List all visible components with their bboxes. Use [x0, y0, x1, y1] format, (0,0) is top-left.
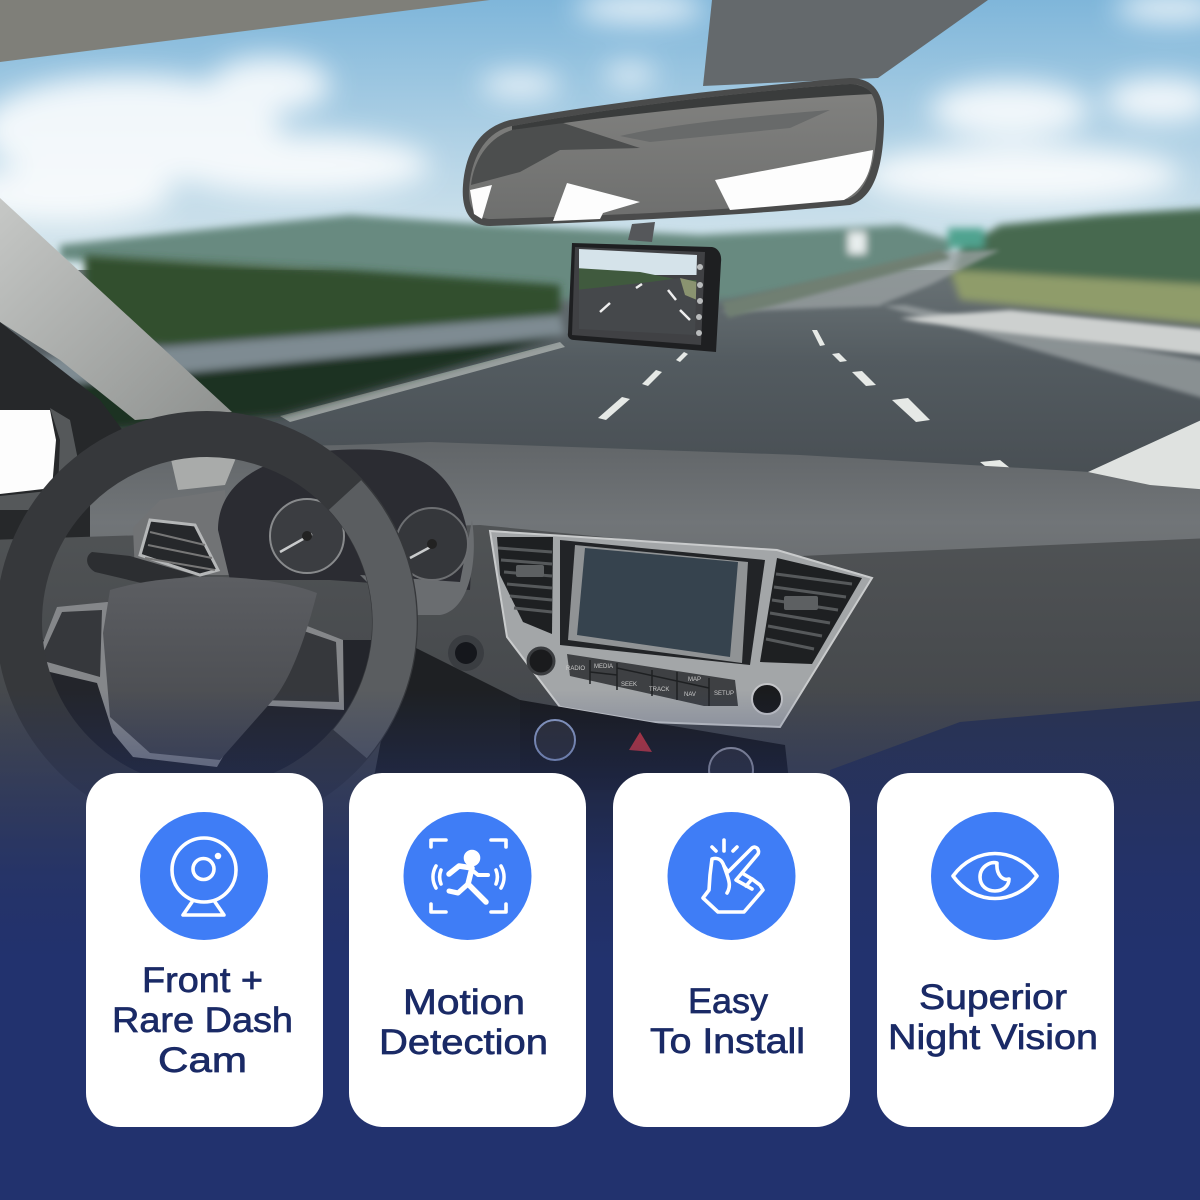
label: Easy To Install	[650, 982, 805, 1061]
icon: webcam	[172, 838, 236, 915]
label: Easy To Install: To Install	[650, 1022, 805, 1061]
navy gradient overlay	[0, 690, 1200, 1030]
label: Easy To Install: Easy	[688, 982, 769, 1021]
icon: finger snap hand	[703, 840, 763, 912]
start button	[448, 635, 484, 671]
bottom navy band	[0, 1000, 1200, 1200]
rearview mirror	[463, 78, 884, 226]
label: Superior Night Vision: Superior	[919, 978, 1067, 1017]
icon: eye	[953, 854, 1037, 898]
label: Superior Night Vision: Night Vision	[888, 1018, 1098, 1057]
background: roadside hedge and guard rail	[0, 255, 565, 440]
wheel ring	[19, 434, 395, 810]
mirror dark reflection	[471, 122, 640, 185]
side mirror and side window	[0, 322, 130, 560]
label: Motion Detection: Detection	[379, 1023, 548, 1062]
radio buttons: MAP	[688, 677, 701, 683]
sun visor top left	[0, 0, 490, 62]
right spoke buttons	[258, 628, 339, 702]
radio buttons: TRACK	[649, 687, 669, 693]
radio buttons: MEDIA	[594, 664, 613, 670]
left center vent	[497, 537, 553, 634]
card: Superior Night Vision	[877, 773, 1114, 1127]
background: road base	[0, 270, 1200, 500]
center stack silver trim	[490, 531, 872, 727]
mirror glass	[469, 84, 877, 219]
dash cam buttons	[696, 264, 703, 336]
airbag	[103, 577, 317, 760]
windshield right corner	[1088, 416, 1200, 490]
left spoke buttons	[40, 610, 102, 677]
radio buttons: NAV	[684, 692, 696, 698]
mirror white reflections	[470, 150, 873, 221]
wheel interior lower shadow	[30, 640, 380, 810]
instrument cluster	[218, 449, 474, 615]
background: sky with clouds	[0, 0, 1200, 320]
card: Front + Rare Dash Cam	[86, 773, 323, 1127]
background: distant tree line	[60, 208, 1200, 325]
stack knobs	[528, 648, 782, 714]
dash cam screen	[579, 249, 697, 321]
label: Front + Rare Dash Cam: Rare Dash	[112, 1001, 293, 1040]
infotainment screen	[560, 540, 765, 665]
steering wheel	[19, 434, 395, 810]
radio buttons: SETUP	[714, 691, 734, 697]
icon: running person in detection frame	[431, 840, 506, 912]
wheel ring highlight	[345, 495, 395, 744]
dash cam device	[568, 243, 721, 352]
label: Superior Night Vision	[888, 978, 1098, 1057]
card: Easy To Install	[613, 773, 850, 1127]
lower console dark area	[330, 640, 830, 1010]
label: Motion Detection: Motion	[403, 983, 525, 1022]
mirror top band	[512, 84, 872, 130]
label: Front + Rare Dash Cam	[112, 961, 293, 1080]
label: Front + Rare Dash Cam: Front +	[142, 961, 263, 1000]
silver trim behind wheel	[170, 448, 240, 490]
radio buttons	[566, 654, 738, 706]
dashboard top pad	[90, 425, 1200, 620]
mirror sunroof detail	[620, 110, 830, 142]
radio buttons: SEEK	[621, 682, 637, 688]
dashboard right panel shade	[830, 700, 1200, 1010]
roof mirror mount	[703, 0, 988, 86]
climate controls and hazard	[520, 700, 790, 792]
mirror stem	[628, 222, 655, 242]
label: Motion Detection	[379, 983, 548, 1062]
card: Motion Detection	[349, 773, 586, 1127]
radio buttons: RADIO	[566, 666, 585, 672]
label: Front + Rare Dash Cam: Cam	[158, 1041, 247, 1080]
left air vent and stalk	[87, 520, 218, 585]
background: highway markings and barriers	[280, 250, 1200, 470]
dashboard lower body	[0, 525, 1200, 1010]
right center vent	[760, 558, 862, 664]
panel left of cluster	[133, 490, 230, 575]
silver spokes	[33, 602, 344, 767]
A-pillar	[0, 198, 232, 420]
